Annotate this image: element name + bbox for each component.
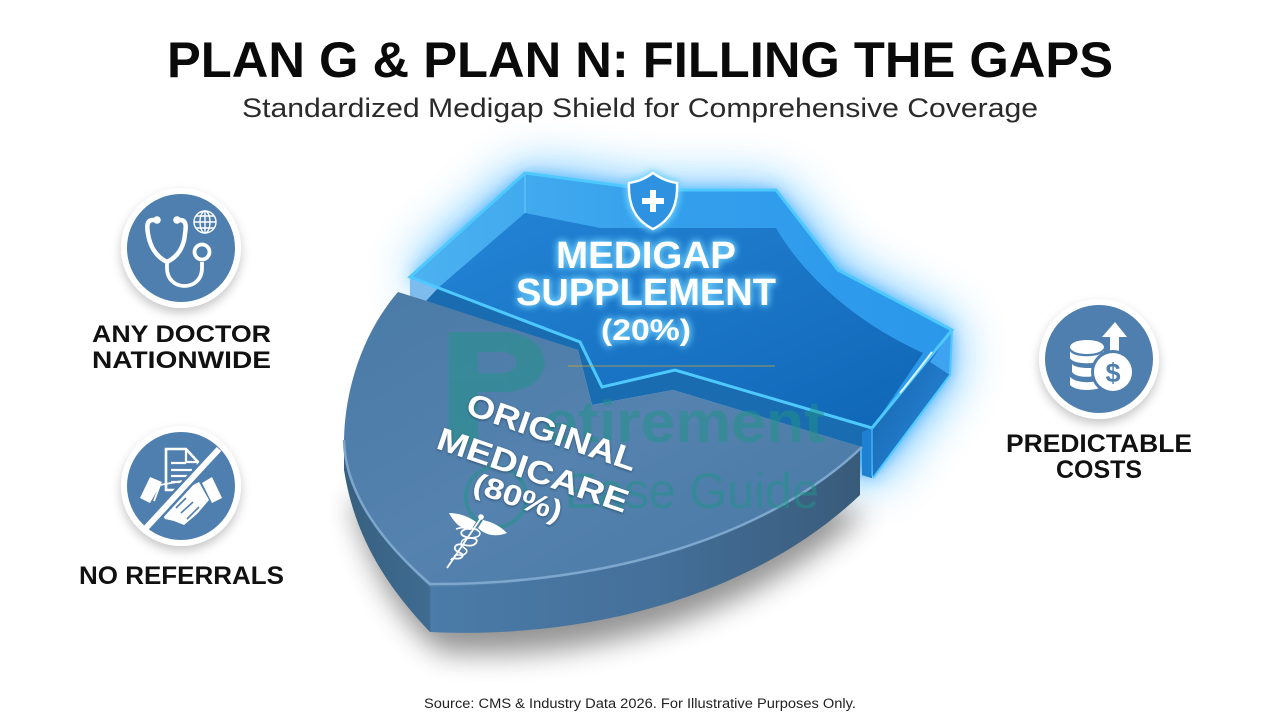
chart: 3D shield split into two segments	[344, 173, 952, 654]
watermark: retirement ease guide: etirement	[543, 390, 825, 455]
label: any doctor nationwide	[92, 321, 271, 374]
label: original medicare: ORIGINAL	[462, 386, 642, 478]
subtitle: Standardized Medigap Shield for Comprehensive Coverage	[242, 93, 1038, 123]
label: predictable costs: PREDICTABLE	[1006, 430, 1192, 458]
watermark: retirement ease guide: Ease Guide	[565, 463, 819, 519]
source note: Source: CMS & Industry Data 2026. For Illustrative Purposes Only.	[424, 696, 856, 711]
icon: predictable costs: $	[1105, 358, 1121, 388]
label: medigap supplement	[516, 235, 776, 347]
label: medigap supplement: SUPPLEMENT	[516, 272, 776, 314]
segment: original medicare 80%	[344, 292, 862, 633]
label: medigap supplement: (20%)	[601, 314, 691, 347]
label: original medicare: MEDICARE	[433, 420, 633, 520]
icon: any doctor nationwide	[121, 188, 241, 308]
title: PLAN G & PLAN N: FILLING THE GAPS	[167, 32, 1113, 88]
icon: shield with plus	[629, 173, 677, 229]
label: predictable costs	[1006, 430, 1192, 484]
icon: no referrals	[121, 426, 241, 546]
label: original medicare: (80%)	[469, 468, 566, 528]
icon: caduceus	[447, 513, 507, 568]
ground shadow	[352, 480, 866, 654]
watermark: retirement ease guide	[449, 332, 825, 527]
segment: medigap supplement 20%	[410, 173, 952, 478]
icon: predictable costs	[1039, 299, 1159, 419]
label: any doctor nationwide: NATIONWIDE	[92, 347, 271, 374]
label: original medicare	[433, 386, 642, 528]
label: predictable costs: COSTS	[1056, 456, 1142, 484]
label: medigap supplement: MEDIGAP	[556, 235, 736, 277]
label: no referrals: NO REFERRALS	[79, 562, 284, 590]
label: any doctor nationwide: ANY DOCTOR	[92, 321, 271, 348]
